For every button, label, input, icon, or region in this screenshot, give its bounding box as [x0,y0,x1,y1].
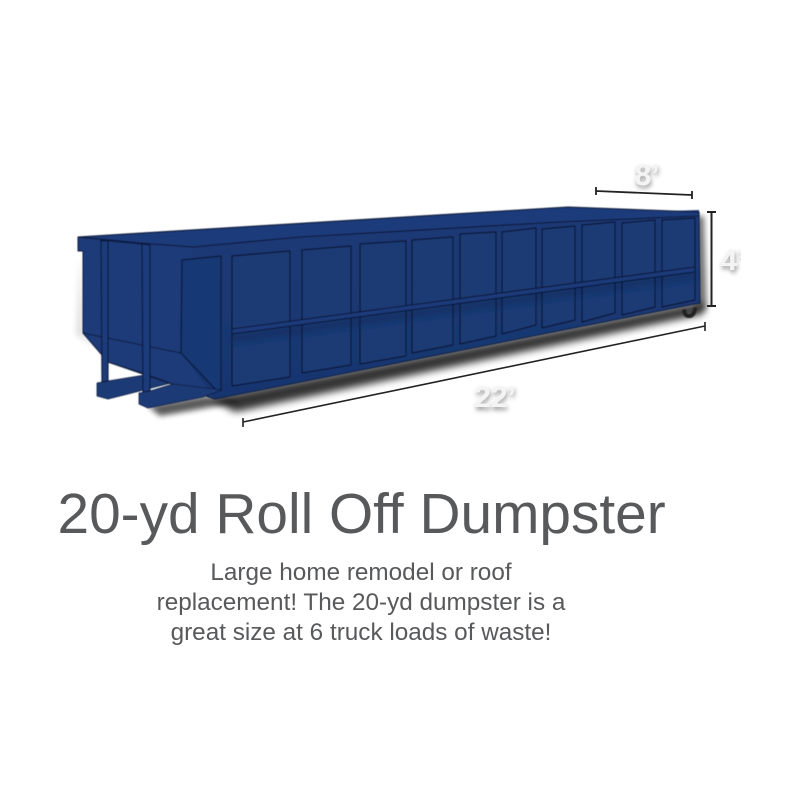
side panels [232,218,695,386]
dimension line: 4 feet [707,212,716,306]
label: 4 feet: 4’ [720,244,746,277]
post: front [142,244,150,392]
end face [78,237,221,399]
rim underline [100,240,150,245]
skid rail: front [139,384,222,408]
long side face [181,210,700,399]
corner gusset [181,256,221,391]
description text: replacement! The 20-yd dumpster is a [157,589,565,616]
description text [157,559,566,646]
drop shadow beneath dumpster [76,216,707,416]
post: rear [101,241,108,382]
wheel [682,307,697,318]
dimension line: 22 feet [243,322,705,427]
skid rail: rear [97,371,175,399]
description text: Large home remodel or roof [210,559,512,586]
dumpster body [78,207,700,408]
rail shadow [232,273,695,342]
label: 8 feet: 8’ [634,159,660,192]
end face slope lines [83,213,700,399]
label: 22 feet: 22’ [474,381,516,414]
title: 20-yd Roll Off Dumpster [58,483,666,546]
top rim [78,207,699,247]
description text: great size at 6 truck loads of waste! [171,619,551,646]
dimension line: 8 feet [596,187,692,199]
illustration: dumpster with dimensions [74,164,741,427]
horizontal rail [232,267,695,334]
